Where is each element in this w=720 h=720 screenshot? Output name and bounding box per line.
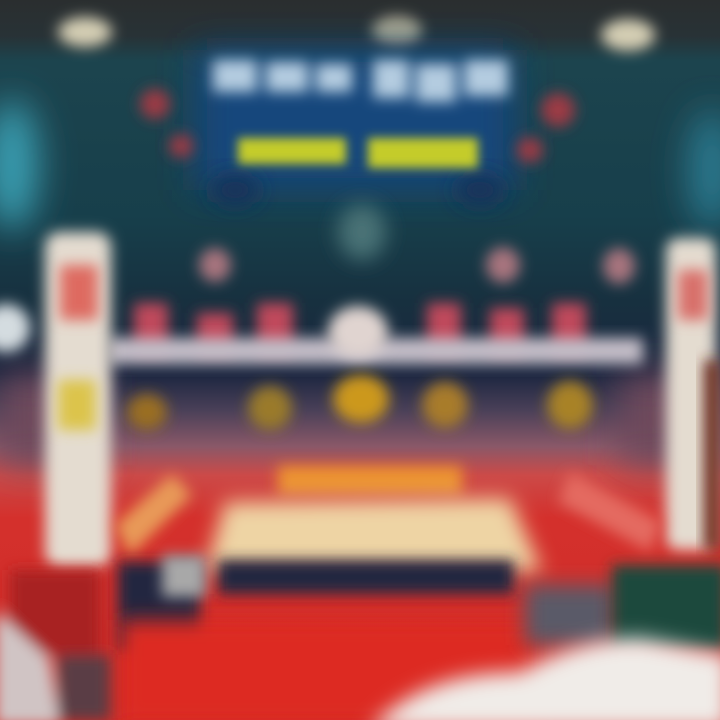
yellow medallions [127, 375, 593, 430]
left foreground figure [0, 555, 206, 720]
right ramp [558, 472, 662, 552]
ring [205, 466, 542, 572]
ring orange strip [278, 466, 462, 494]
center ornament [328, 306, 388, 358]
scoreboard dark base [211, 174, 504, 206]
right foreground figure [525, 585, 615, 645]
white band [108, 338, 643, 364]
ring canvas [205, 498, 542, 572]
scoreboard white heading [213, 60, 508, 102]
scoreboard panel [195, 50, 515, 206]
ceiling lights [58, 16, 655, 51]
scoreboard yellow text [238, 138, 478, 168]
red foreground floor [120, 620, 540, 720]
white foreground shape [370, 638, 720, 720]
red hanging lights [140, 89, 575, 163]
crowd silhouette [118, 560, 514, 650]
left side white blob [0, 304, 30, 352]
green foreground figure [612, 565, 720, 650]
left ramp [115, 474, 192, 556]
side glows [0, 100, 720, 465]
upper figures [199, 247, 635, 284]
right pillar [666, 238, 720, 550]
left pillar [45, 232, 111, 567]
center emblem [338, 204, 386, 260]
red figures above band [134, 303, 586, 353]
